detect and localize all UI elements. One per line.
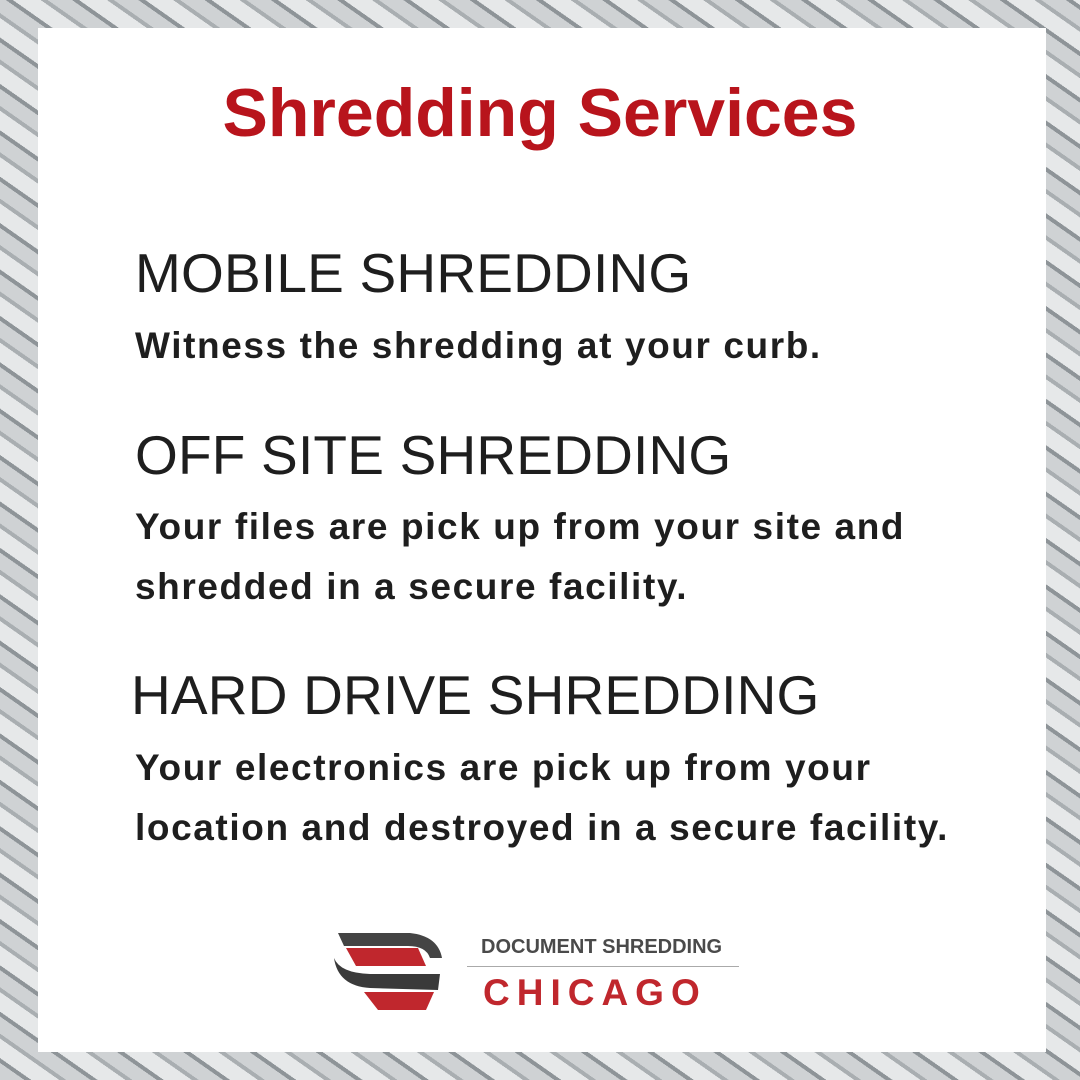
logo: [334, 933, 739, 1013]
icon: logo mark: [334, 933, 442, 1010]
title: Shredding Services: [223, 75, 857, 151]
heading: mobile shredding: MOBILE SHREDDING: [135, 242, 691, 304]
heading: hard drive: HARD DRIVE SHREDDING: [131, 664, 820, 726]
text: off site: [135, 506, 905, 607]
logo: CHICAGO: [483, 972, 707, 1013]
heading: off site: OFF SITE SHREDDING: [135, 424, 731, 486]
text: mobile: Witness the shredding at your curb.: [135, 325, 822, 366]
text: hard drive: [135, 747, 949, 848]
text: off site: Your files are pick up from your site and: [135, 506, 905, 547]
text: hard drive: location and destroyed in a secure facility.: [135, 807, 949, 848]
text: hard drive: Your electronics are pick up from your: [135, 747, 872, 788]
logo text: DOCUMENT SHREDDING: [481, 936, 722, 958]
text: off site: shredded in a secure facility.: [135, 566, 688, 607]
